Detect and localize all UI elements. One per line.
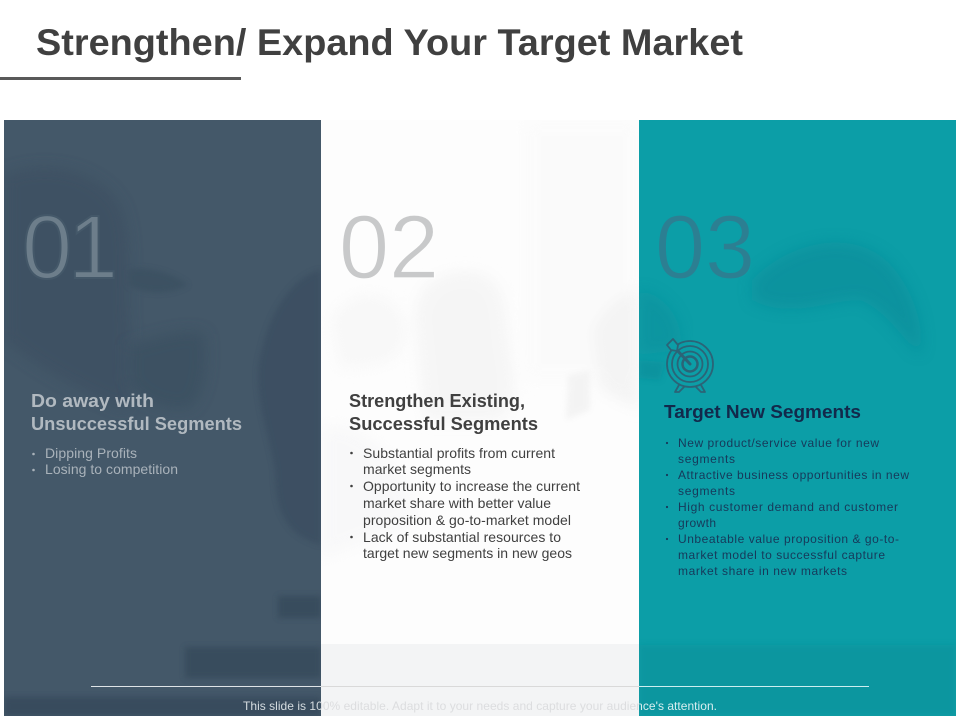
bullet list: Losing to competition [45, 461, 178, 477]
bullet list: market model to successful capture [678, 548, 885, 562]
footer note: This slide is 100% editable. Adapt it to your needs and capture your audience's attention. [243, 699, 717, 713]
bullet list: Attractive business opportunities in new [678, 468, 909, 482]
bullet list: High customer demand and customer [678, 500, 898, 514]
bullet list: Unbeatable value proposition & go-to- [678, 532, 899, 546]
bullet list [666, 436, 909, 578]
heading: Do away with [31, 391, 154, 411]
heading: Unsuccessful Segments [31, 414, 242, 434]
photo overlay: panel 2 [570, 304, 631, 414]
bullet list: Lack of substantial resources to [363, 529, 561, 545]
bullet list: proposition & go-to-market model [363, 512, 571, 528]
heading: Strengthen Existing, [349, 391, 525, 411]
bullet list: segments [678, 484, 735, 498]
panel: strengthen existing segments [321, 216, 639, 716]
bullet list: Substantial profits from current [363, 445, 555, 461]
heading [349, 391, 538, 434]
bullet list [350, 445, 580, 561]
title: Strengthen/ Expand Your Target Market [36, 22, 743, 63]
number 01: 01 [22, 198, 118, 298]
panel: do away with unsuccessful segments [4, 120, 321, 716]
bullet list: New product/service value for new [678, 436, 879, 450]
photo overlay: panel 1 [4, 273, 320, 716]
panel: target new segments [639, 120, 956, 716]
bullet list: growth [678, 516, 716, 530]
table band: panel 2 [321, 644, 639, 716]
bullet list: Opportunity to increase the current [363, 478, 580, 494]
bullet list: market share in new markets [678, 564, 847, 578]
photo overlay: panel 3 [639, 242, 956, 716]
heading: Target New Segments [664, 402, 861, 422]
icon: target with arrow [667, 339, 713, 392]
bullet list: segments [678, 452, 735, 466]
title underline [0, 77, 241, 80]
number 03: 03 [655, 198, 755, 298]
bullet list: target new segments in new geos [363, 545, 572, 561]
bullet list: Dipping Profits [45, 445, 137, 461]
number 02: 02 [339, 198, 439, 298]
bullet list [32, 445, 178, 477]
heading: Successful Segments [349, 414, 538, 434]
heading [31, 391, 242, 434]
footer rule [91, 686, 869, 687]
bullet list: market share with better value [363, 495, 551, 511]
bullet list: market segments [363, 461, 471, 477]
